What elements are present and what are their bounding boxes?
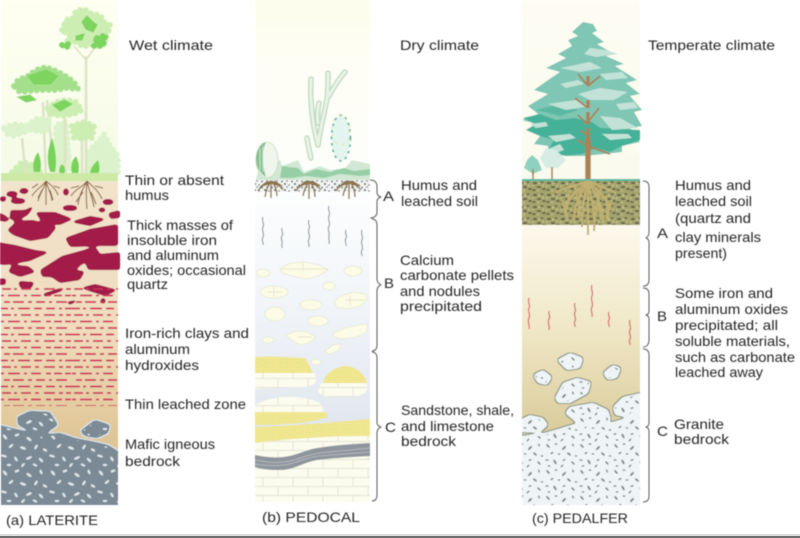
label: mafic bedrock: bedrock bbox=[125, 453, 181, 469]
brace: horizon A bbox=[370, 180, 381, 218]
label: iron and aluminum oxides: quartz bbox=[127, 276, 168, 292]
label: calcium carbonate: precipitated bbox=[400, 298, 482, 314]
iron oxide masses bbox=[0, 188, 120, 305]
label: calcium carbonate bbox=[400, 252, 514, 314]
illustration: temperate tree bbox=[522, 22, 642, 180]
label: iron and aluminum oxides bbox=[675, 285, 795, 380]
label: clays and hydroxides: Iron-rich clays and bbox=[125, 325, 249, 341]
panel: laterite soil profile bbox=[0, 0, 249, 528]
caption: pedocal: (b) PEDOCAL bbox=[262, 509, 360, 525]
horizon letters: A bbox=[657, 225, 669, 241]
label: humus: Thin or absent bbox=[125, 172, 224, 188]
brace: horizon C bbox=[372, 352, 381, 501]
label: clays and hydroxides: hydroxides bbox=[125, 357, 199, 373]
label: iron and aluminum oxides: aluminum oxides bbox=[675, 301, 788, 317]
caption: laterite: (a) LATERITE bbox=[6, 512, 98, 528]
horizon letters: B bbox=[657, 308, 667, 324]
calcium carbonate nodules bbox=[256, 262, 368, 365]
roots bbox=[32, 181, 103, 209]
label: mafic bedrock: Mafic igneous bbox=[125, 436, 215, 452]
label: granite bedrock bbox=[674, 416, 730, 447]
iron oxide streaks bbox=[528, 285, 631, 345]
label: clays and hydroxides bbox=[125, 325, 249, 373]
heading: wet climate: Wet climate bbox=[129, 37, 213, 53]
label: iron and aluminum oxides: insoluble iron bbox=[127, 232, 217, 248]
illustration: desert plants bbox=[256, 72, 370, 180]
label: bedrock types: Sandstone, shale, bbox=[401, 402, 514, 418]
label: calcium carbonate: and nodules bbox=[400, 283, 480, 299]
humus and leached band bbox=[255, 180, 370, 192]
label: iron and aluminum oxides bbox=[127, 217, 246, 292]
label: bedrock types: and limestone bbox=[401, 418, 494, 434]
granite boulders and bedrock bbox=[521, 352, 641, 506]
brace: horizon A bbox=[643, 181, 649, 286]
horizon letters bbox=[657, 225, 669, 439]
soil column background bbox=[255, 192, 370, 502]
heading: dry climate: Dry climate bbox=[400, 37, 479, 53]
label: iron and aluminum oxides: oxides; occasional bbox=[127, 262, 246, 278]
label: mafic bedrock bbox=[125, 436, 215, 469]
panel: pedalfer soil profile bbox=[516, 0, 795, 526]
label: iron and aluminum oxides: Thick masses of bbox=[127, 217, 233, 233]
label: bedrock types bbox=[401, 402, 514, 449]
horizon letters: A bbox=[383, 188, 395, 204]
label: granite bedrock: bedrock bbox=[674, 431, 730, 447]
label: humus and leached soil: clay minerals bbox=[675, 229, 761, 245]
wet climate sky background bbox=[1, 0, 118, 174]
root mass bbox=[556, 181, 616, 235]
label: humus and leached soil bbox=[401, 177, 478, 209]
dry climate sky background bbox=[255, 0, 370, 180]
label: humus and leached soil: present) bbox=[675, 245, 727, 261]
label: humus and leached soil bbox=[675, 177, 761, 261]
label: humus and leached soil: (quartz and bbox=[675, 210, 751, 226]
label: iron and aluminum oxides: Some iron and bbox=[675, 285, 773, 301]
label: humus bbox=[125, 172, 224, 203]
ground strip bbox=[522, 179, 640, 181]
label: calcium carbonate: carbonate pellets bbox=[400, 267, 514, 283]
label: clays and hydroxides: aluminum bbox=[125, 341, 190, 357]
ground cover strip bbox=[1, 173, 118, 181]
label: iron and aluminum oxides: soluble materials, bbox=[675, 333, 790, 349]
panel: pedocal soil profile bbox=[255, 0, 514, 525]
illustration: small trees bbox=[524, 148, 566, 181]
label: humus: humus bbox=[125, 187, 169, 203]
leaching streaks bbox=[262, 206, 363, 256]
label: humus and leached soil: leached soil bbox=[401, 193, 478, 209]
label: iron and aluminum oxides: leached away bbox=[675, 364, 763, 380]
soil column background bbox=[1, 181, 118, 505]
label: bedrock types: bedrock bbox=[401, 433, 457, 449]
label: iron and aluminum oxides: precipitated; all bbox=[675, 317, 778, 333]
label: humus and leached soil: leached soil bbox=[675, 193, 752, 209]
bedrock layers: sandstone, shale, limestone bbox=[255, 357, 370, 502]
horizon letters bbox=[383, 188, 396, 435]
label: leached zone: Thin leached zone bbox=[125, 396, 246, 412]
iron-rich clay dashes bbox=[1, 287, 118, 406]
label: iron and aluminum oxides: such as carbonate bbox=[675, 349, 795, 365]
humus layer bbox=[522, 181, 640, 225]
brace: horizon C bbox=[643, 349, 649, 502]
label: iron and aluminum oxides: and aluminum bbox=[127, 247, 219, 263]
horizon letters: B bbox=[384, 275, 394, 291]
roots bbox=[258, 181, 361, 199]
label: granite bedrock: Granite bbox=[674, 416, 724, 432]
soil column background bbox=[522, 225, 640, 440]
horizon letters: C bbox=[657, 423, 668, 439]
label: calcium carbonate: Calcium bbox=[400, 252, 454, 268]
caption: pedalfer: (c) PEDALFER bbox=[532, 510, 628, 526]
brace: horizon B bbox=[643, 288, 649, 347]
illustration: rainforest trees bbox=[4, 9, 118, 178]
brace: horizon B bbox=[372, 219, 381, 351]
label: humus and leached soil: Humus and bbox=[675, 177, 751, 193]
horizon letters: C bbox=[385, 419, 396, 435]
label: humus and leached soil: Humus and bbox=[401, 177, 477, 193]
mafic bedrock bbox=[0, 410, 118, 506]
heading: temperate climate: Temperate climate bbox=[648, 37, 775, 53]
temperate sky background bbox=[522, 0, 640, 180]
